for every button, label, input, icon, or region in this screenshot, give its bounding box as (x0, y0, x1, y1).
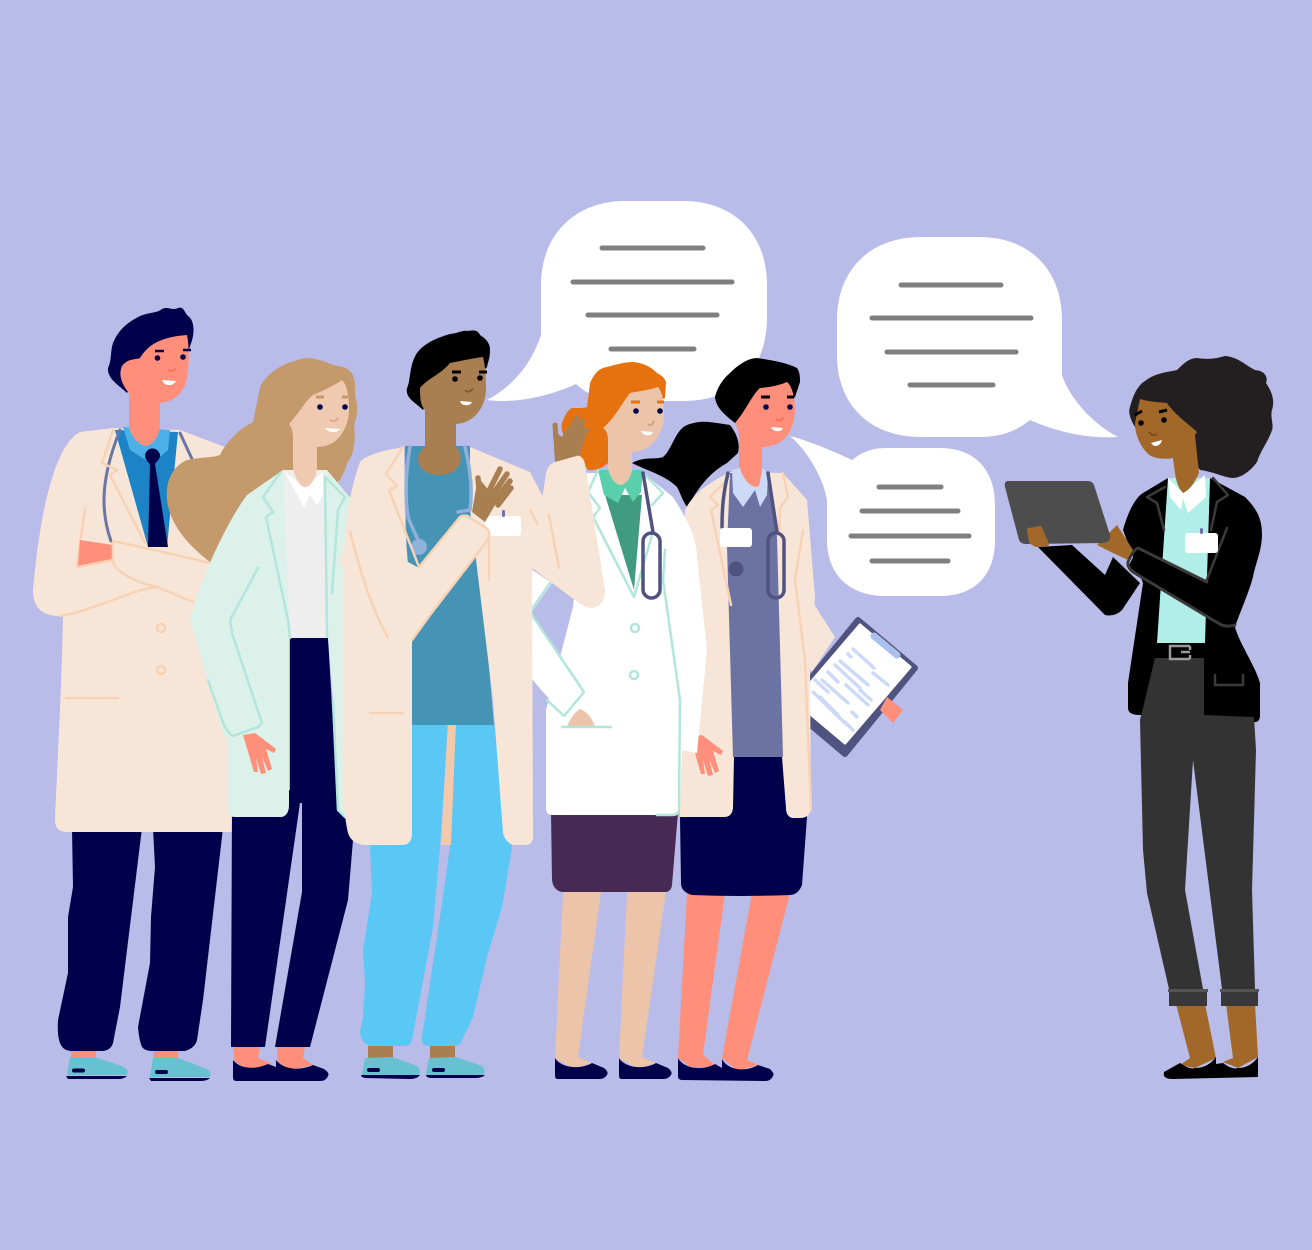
jacket pocket (1215, 674, 1243, 685)
cuffs (1168, 989, 1259, 1006)
person: doctor with long blonde hair (167, 358, 357, 1081)
neck and face (1135, 399, 1199, 493)
sleeve (790, 590, 835, 672)
neck and face (735, 382, 795, 487)
front arm (340, 514, 489, 642)
shoes (361, 1057, 485, 1079)
coat lines (263, 473, 345, 817)
stethoscope (722, 473, 784, 598)
collar (598, 470, 643, 503)
coat button lower (630, 671, 638, 679)
stethoscope (643, 473, 660, 598)
lapels (588, 470, 680, 815)
shirt (1157, 478, 1210, 643)
person: doctor behind group with black hair (632, 358, 915, 1081)
tablet hand back (1097, 525, 1133, 560)
badge pin (1200, 528, 1203, 534)
lower legs (1176, 1004, 1258, 1068)
coat button upper (631, 624, 639, 632)
face details (316, 397, 348, 432)
collar (123, 427, 170, 464)
speech bubble: top centre (487, 201, 767, 401)
belt (1157, 643, 1205, 658)
person: colleague with tablet (1005, 356, 1273, 1079)
lapels (1147, 478, 1228, 582)
badge pin (502, 510, 505, 517)
lapel lines (350, 447, 560, 713)
hand in pocket (567, 709, 595, 727)
hand holding tablet (1029, 528, 1047, 545)
badge (1185, 533, 1218, 553)
trousers (360, 722, 512, 1046)
coat button lower (157, 666, 165, 674)
face details (761, 397, 794, 431)
legs (678, 893, 790, 1071)
neck and head (120, 335, 189, 446)
belt buckle (1170, 646, 1190, 659)
chest piece (728, 562, 744, 576)
face details (631, 402, 664, 435)
coat (546, 473, 707, 815)
lapels (66, 430, 145, 698)
skirt (551, 812, 678, 892)
coat (680, 472, 815, 818)
pocket line (562, 726, 611, 728)
stethoscope (104, 430, 192, 541)
hair (1129, 356, 1273, 478)
tablet (1005, 481, 1110, 544)
tie (145, 449, 168, 547)
trousers (1140, 658, 1256, 989)
coat button upper (157, 624, 165, 632)
hair (562, 362, 666, 470)
collar (1168, 475, 1206, 513)
stethoscope (406, 447, 471, 540)
feet (368, 1046, 455, 1060)
trousers (231, 638, 353, 1047)
neck and face (289, 380, 349, 487)
raised hand (553, 418, 588, 462)
sleeve outline (530, 583, 584, 716)
shoes (66, 1057, 211, 1081)
person: doctor with crossed arms (33, 308, 260, 1081)
person: doctor in blue scrubs (340, 330, 605, 1079)
speech bubble: top right (837, 237, 1118, 437)
hand on chest (472, 469, 511, 522)
coat right (470, 447, 550, 845)
coat lines (710, 473, 811, 810)
trousers (58, 828, 223, 1051)
badge (720, 528, 752, 547)
collar (732, 468, 768, 507)
scrub top (405, 446, 494, 725)
skirt (680, 757, 807, 896)
feet (71, 1051, 178, 1059)
lower hand (692, 735, 723, 776)
hair top (715, 358, 800, 425)
folded arm (33, 541, 260, 616)
right arm (1128, 548, 1237, 628)
hand (243, 733, 276, 774)
left sleeve (530, 615, 584, 716)
shirt (115, 430, 178, 547)
raised sleeve (532, 455, 605, 608)
legs (555, 892, 666, 1069)
person: doctor with red hair (525, 362, 707, 1079)
sleeve line (208, 568, 262, 736)
hair (407, 330, 490, 410)
shirt (283, 470, 327, 638)
coat left (343, 447, 412, 845)
speech bubble: small lower right (790, 436, 995, 596)
coat (33, 428, 256, 832)
chest piece (411, 539, 427, 555)
hair (108, 308, 193, 393)
face details (1135, 410, 1167, 446)
coat back strip (441, 722, 456, 845)
face details (155, 350, 191, 385)
shoes (678, 1058, 774, 1081)
coat fragment (525, 565, 552, 620)
shoes (233, 1060, 328, 1081)
coral hand (78, 540, 113, 566)
shoes (555, 1058, 672, 1079)
clipboard (788, 620, 915, 754)
collar (285, 472, 323, 508)
shirt (605, 495, 642, 590)
feet (233, 1047, 313, 1070)
face details (452, 372, 487, 405)
shoes (1164, 1057, 1258, 1079)
hand on clipboard (880, 697, 903, 723)
left arm (1038, 545, 1140, 615)
neck and face (603, 387, 664, 485)
neck and face (418, 357, 486, 475)
jacket (1123, 478, 1262, 722)
badge (485, 516, 521, 536)
coat (190, 470, 352, 817)
vest (727, 473, 783, 757)
hair (167, 358, 357, 562)
ponytail (632, 422, 739, 507)
